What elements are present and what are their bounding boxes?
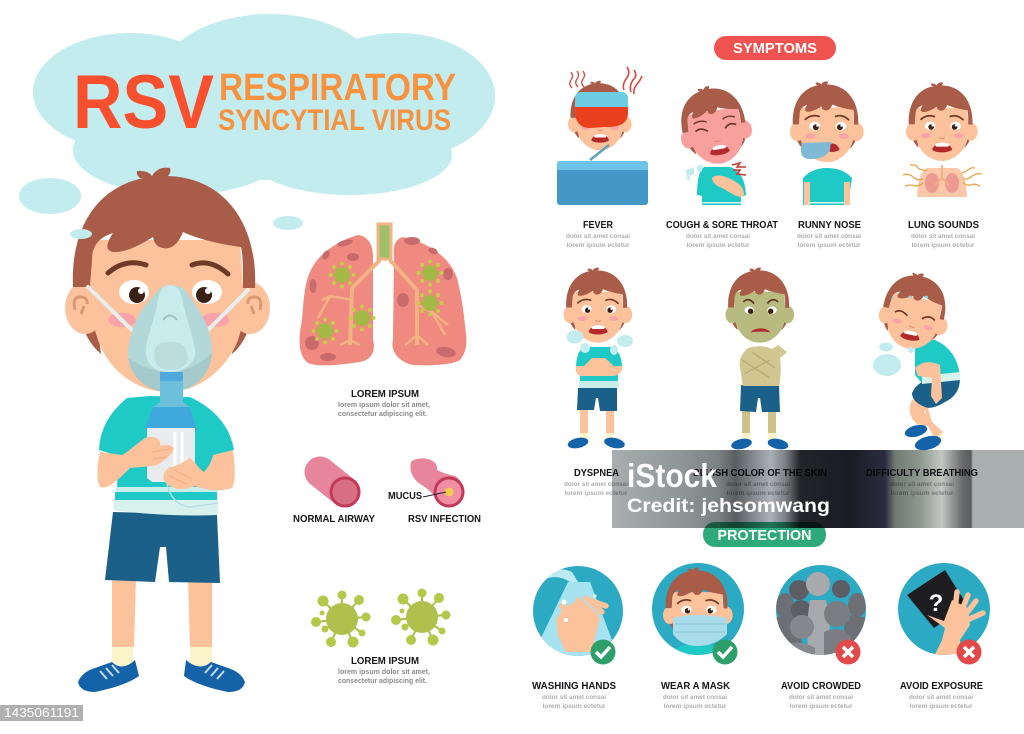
label: lung sounds: lorem ipsum ectetur <box>912 242 975 249</box>
label: dyspnea: DYSPNEA <box>574 467 619 479</box>
label: cough and sore throat: COUGH & SORE THROAT <box>666 219 779 231</box>
heading: symptoms: SYMPTOMS <box>733 40 817 57</box>
icon: hand and black card <box>898 563 990 665</box>
thought cloud <box>19 14 495 230</box>
dark patches <box>305 237 457 361</box>
shorts <box>105 512 220 583</box>
label: bluish colour of the skin: dolor sit amet consai <box>726 481 790 488</box>
lungs caption <box>338 388 430 418</box>
icon: green check <box>712 640 738 664</box>
watermark logo: iStock <box>627 457 718 494</box>
t-shirt <box>99 396 234 515</box>
symptom: difficulty breathing <box>866 267 978 497</box>
label: cough and sore throat <box>666 219 779 249</box>
label: dyspnea: dolor sit amet consai <box>564 481 628 488</box>
head <box>65 168 270 392</box>
stock ID badge: 1435061191 <box>4 706 79 720</box>
RSV infected airway <box>388 458 481 525</box>
icon: boy short of breath <box>563 268 633 450</box>
label: bluish colour of the skin: lorem ipsum ectetur <box>726 490 790 497</box>
label: avoid exposure: AVOID EXPOSURE <box>900 680 983 692</box>
icon: feverish boy in bed <box>557 67 648 205</box>
label: fever <box>566 219 630 249</box>
symptom: dyspnea <box>563 268 633 497</box>
title: RSV: RSV <box>73 60 214 145</box>
label: washing hands: lorem ipsum ectetur <box>542 703 606 710</box>
lung lobes <box>300 235 466 365</box>
label: cough and sore throat: dolor sit amet consai <box>686 233 750 240</box>
label: runny nose: dolor sit amet consai <box>797 233 861 240</box>
subtitle: syncytial virus: SYNCYTIAL VIRUS <box>218 104 451 137</box>
virus particles in lungs <box>312 260 444 344</box>
label: fever: FEVER <box>583 219 613 231</box>
label: runny nose <box>797 219 861 249</box>
lungs caption: consectetur adipiscing elit. <box>338 411 427 418</box>
symptom: fever <box>557 67 648 249</box>
label: difficulty breathing: DIFFICULTY BREATHING <box>866 467 978 479</box>
normal airway <box>293 472 375 525</box>
icon: green check <box>590 640 616 664</box>
icon: boy with runny nose <box>790 81 864 205</box>
protection: washing hands <box>530 566 623 710</box>
icon: red cross <box>836 640 860 664</box>
legs and socks <box>112 578 212 668</box>
symptom: lung sounds <box>903 82 982 249</box>
lungs illustration <box>300 224 466 365</box>
label: avoid exposure <box>900 680 983 710</box>
nebulizer bottle <box>145 372 218 507</box>
label: avoid crowded: dolor sit amet consai <box>789 694 853 701</box>
label: avoid crowded <box>781 680 861 710</box>
label: bluish colour of the skin: BLUISH COLOR OF THE SKIN <box>693 467 827 479</box>
label: avoid crowded: AVOID CROWDED <box>781 680 861 692</box>
virus caption: lorem ipsum dolor sit amet, <box>338 669 430 676</box>
label: difficulty breathing: dolor sit amet consai <box>890 481 954 488</box>
label: washing hands <box>532 680 616 710</box>
label: runny nose: RUNNY NOSE <box>798 219 861 231</box>
protection: avoid crowded <box>775 565 868 710</box>
label: difficulty breathing <box>866 467 978 497</box>
subtitle: respiratory: RESPIRATORY <box>219 67 456 109</box>
icon: boy wearing mask <box>652 563 744 655</box>
icon: red cross <box>956 640 982 664</box>
label: dyspnea: lorem ipsum ectetur <box>564 490 628 497</box>
trachea and bronchi <box>318 224 448 345</box>
virus caption: consectetur adipiscing elit. <box>338 678 427 685</box>
virus caption <box>338 655 430 685</box>
icon: boy with noisy lungs <box>903 82 982 197</box>
label: washing hands: dolor sit amet consai <box>542 694 606 701</box>
shoes <box>78 660 245 692</box>
normal airway: NORMAL AIRWAY <box>293 513 375 525</box>
title <box>73 60 456 145</box>
oxygen mask <box>88 285 248 400</box>
label: wear a mask: WEAR A MASK <box>661 680 730 692</box>
label: avoid exposure: lorem ipsum ectetur <box>910 703 973 710</box>
label: washing hands: WASHING HANDS <box>532 680 616 692</box>
symptom: bluish colour of the skin <box>693 268 827 497</box>
symptom: runny nose <box>790 81 864 249</box>
RSV infected airway: RSV INFECTION <box>408 513 481 525</box>
label: avoid exposure: dolor sit amet consai <box>909 694 973 701</box>
label: difficulty breathing: lorem ipsum ectetur <box>890 490 954 497</box>
label: lung sounds: LUNG SOUNDS <box>908 219 979 231</box>
main boy with oxygen mask <box>65 168 270 692</box>
lungs caption: LOREM IPSUM <box>351 388 419 400</box>
label: cough and sore throat: lorem ipsum ectetur <box>686 242 750 249</box>
label: wear a mask: dolor sit amet consai <box>663 694 727 701</box>
label: dyspnea <box>564 467 628 497</box>
virus caption: LOREM IPSUM <box>351 655 419 667</box>
watermark credit: Credit: jehsomwang <box>627 496 830 517</box>
protection: avoid exposure <box>898 563 990 710</box>
label: bluish colour of the skin <box>693 467 827 497</box>
arms and hands <box>97 437 235 490</box>
label: wear a mask: lorem ipsum ectetur <box>664 703 727 710</box>
symptom: cough and sore throat <box>666 80 779 249</box>
icon: boy bent over breathing hard <box>873 267 960 453</box>
label: fever: lorem ipsum ectetur <box>566 242 630 249</box>
RSV infected airway: MUCUS <box>388 490 422 502</box>
watermark band <box>612 450 1024 528</box>
label: runny nose: lorem ipsum ectetur <box>798 242 861 249</box>
heading: protection <box>703 522 826 547</box>
label: wear a mask <box>661 680 730 710</box>
icon: boy with discoloured skin <box>725 268 794 451</box>
icon: hand and black card: ? <box>929 590 943 617</box>
icon: crowd silhouettes <box>775 565 868 660</box>
protection: wear a mask <box>652 563 744 710</box>
label: lung sounds <box>908 219 979 249</box>
icon: washing hands <box>530 566 623 660</box>
label: fever: dolor sit amet consai <box>566 233 630 240</box>
heading: protection: PROTECTION <box>718 527 812 544</box>
label: lung sounds: dolor sit amet consai <box>911 233 975 240</box>
heading: symptoms <box>714 36 836 60</box>
lungs caption: lorem ipsum dolor sit amet, <box>338 402 430 409</box>
label: avoid crowded: lorem ipsum ectetur <box>790 703 853 710</box>
virus illustrations <box>311 588 450 648</box>
icon: coughing boy <box>673 80 757 205</box>
